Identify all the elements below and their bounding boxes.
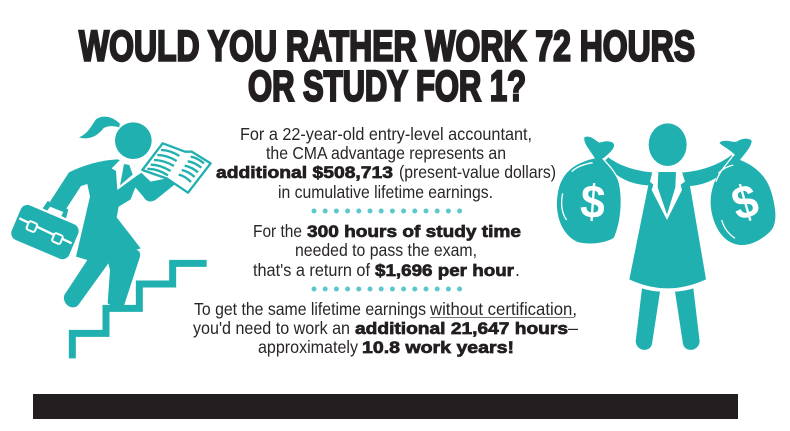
text block: without certification: 10.8 work years! — [362, 338, 514, 357]
text block: without certification — [193, 299, 578, 357]
text block: without certification: you'd need to work an — [193, 318, 350, 338]
text block: return per hour: $1,696 per hour — [375, 261, 514, 280]
divider dots — [312, 208, 462, 214]
title: OR STUDY FOR 1? — [248, 62, 526, 110]
icon: woman's body — [50, 159, 176, 307]
icon: head — [115, 122, 152, 159]
icon: stairs — [72, 263, 207, 358]
icon: person holding two money bags — [557, 123, 775, 350]
divider dots — [312, 286, 462, 292]
icon: woman climbing stairs with book and briefcase — [9, 117, 211, 358]
icon: left money bag — [557, 137, 621, 243]
icon: briefcase — [9, 201, 81, 261]
text block: without certification: additional 21,647 hours — [355, 319, 568, 338]
text block: return per hour: . — [515, 260, 520, 280]
icon: right money bag — [711, 139, 775, 245]
icon: dress and arms — [604, 155, 735, 288]
icon: collar — [650, 172, 685, 220]
icon: legs — [636, 288, 660, 350]
footer bar — [33, 394, 738, 419]
icon: collar — [112, 159, 142, 190]
icon: open book — [142, 143, 211, 193]
text block: return per hour: 300 hours of study time — [307, 222, 521, 241]
text block: CMA advantage — [216, 124, 556, 202]
text block: CMA advantage: the CMA advantage represents an — [266, 143, 506, 163]
icon: dollar sign: $ — [579, 175, 607, 229]
text block: CMA advantage: For a 22-year-old entry-level accountant, — [240, 124, 532, 144]
title — [79, 22, 695, 110]
text block: return per hour: that's a return of — [253, 260, 370, 280]
text block: CMA advantage: (present-value dollars) — [399, 162, 556, 182]
icon: dollar sign: $ — [726, 174, 764, 231]
text block: without certification: without certification, — [429, 299, 577, 319]
text block: return per hour — [253, 221, 521, 280]
text block: return per hour: needed to pass the exam, — [295, 240, 477, 260]
text block: without certification: – — [568, 318, 578, 338]
text block: CMA advantage: in cumulative lifetime earnings. — [278, 182, 493, 202]
text block: without certification: approximately — [258, 337, 358, 357]
icon: ponytail — [79, 117, 120, 138]
text block: CMA advantage: additional $508,713 — [216, 163, 393, 182]
text block: without certification: To get the same lifetime earnings — [194, 299, 426, 319]
text block: return per hour: For the — [253, 221, 302, 241]
icon: head — [649, 123, 687, 166]
